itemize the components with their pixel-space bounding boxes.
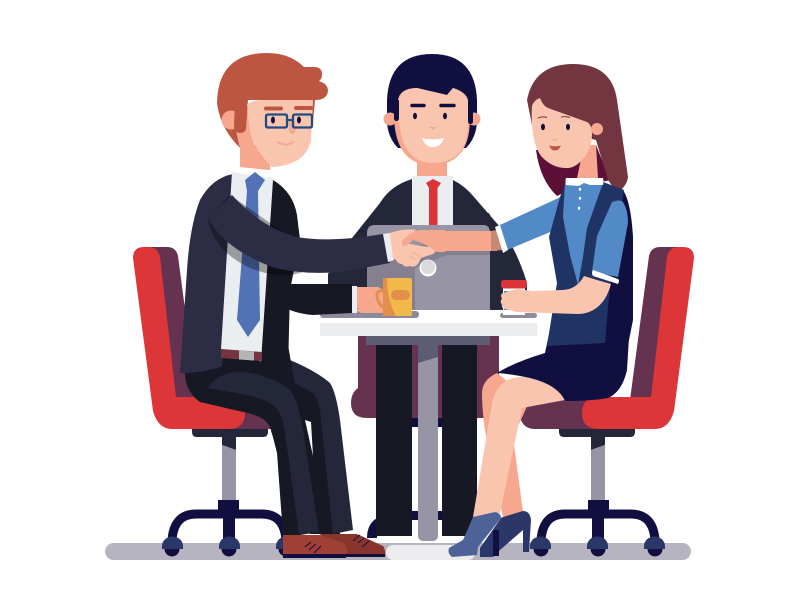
eyes	[541, 124, 545, 130]
brows	[538, 117, 570, 118]
far leg light	[285, 358, 353, 534]
woman	[420, 64, 633, 557]
upper arm sleeve	[592, 200, 628, 277]
mouth	[549, 146, 561, 150]
mug	[377, 278, 412, 316]
hair	[217, 53, 328, 148]
neck	[417, 158, 447, 176]
arm shadow	[208, 195, 330, 275]
back hair	[536, 145, 610, 196]
ear	[591, 123, 603, 135]
handle	[377, 291, 384, 308]
upper arm	[208, 195, 390, 273]
buttons	[579, 189, 580, 208]
jacket right	[261, 180, 300, 370]
fingers	[409, 252, 421, 260]
floor shadow	[105, 543, 691, 560]
jacket left	[180, 174, 240, 373]
tie	[426, 179, 441, 228]
face	[532, 98, 592, 168]
back leg	[482, 373, 530, 517]
forearm holding cup	[501, 276, 611, 314]
eyes	[413, 113, 417, 119]
sideburn	[234, 100, 248, 133]
right office chair	[520, 247, 694, 556]
near leg highlight	[208, 372, 319, 534]
nose	[289, 121, 296, 134]
sleeve	[500, 195, 565, 250]
left office chair	[133, 247, 307, 556]
left man	[180, 53, 394, 558]
ear	[222, 110, 240, 130]
logo	[420, 260, 436, 276]
middle man	[328, 54, 527, 536]
blouse	[563, 183, 603, 285]
neck	[240, 140, 270, 170]
laces	[305, 535, 369, 553]
body	[383, 278, 412, 316]
nose	[429, 127, 437, 130]
woman's hand	[402, 230, 445, 252]
legs	[376, 344, 477, 536]
glasses	[266, 114, 312, 128]
hair	[527, 64, 628, 193]
neck	[577, 145, 598, 178]
lower hand	[352, 286, 357, 313]
laptop	[367, 225, 490, 310]
face shade	[236, 105, 270, 170]
skirt	[497, 320, 630, 401]
far leg dark	[280, 360, 340, 534]
hair strands	[394, 100, 473, 124]
shirt	[221, 172, 273, 362]
handshake	[390, 229, 445, 267]
tray left	[320, 311, 419, 318]
ears	[384, 112, 396, 126]
suit	[328, 179, 527, 310]
far shoe	[320, 534, 385, 557]
collar	[566, 178, 604, 186]
man's hand	[390, 229, 435, 267]
belt	[221, 349, 262, 361]
smile	[422, 138, 444, 147]
label	[391, 290, 410, 300]
lower arm	[272, 284, 352, 315]
tray right	[500, 313, 537, 318]
face	[247, 100, 313, 167]
coffee cup	[501, 280, 527, 315]
back shoe	[480, 511, 531, 557]
table	[320, 310, 537, 541]
brows	[412, 104, 454, 107]
tie	[237, 172, 265, 337]
shirt	[412, 176, 453, 228]
sleeve cuff	[592, 270, 619, 284]
face	[398, 88, 468, 163]
face shade	[394, 88, 470, 165]
middle chair	[351, 213, 499, 538]
under table panel	[366, 335, 490, 345]
cuff	[383, 233, 394, 262]
heel	[493, 530, 499, 556]
table leg	[418, 345, 438, 541]
near shoe	[283, 535, 347, 554]
handshake arm	[420, 231, 497, 251]
near leg dark	[185, 345, 319, 535]
mouth	[278, 142, 293, 144]
table top	[320, 310, 537, 323]
brows	[266, 106, 311, 110]
cuff	[495, 225, 508, 253]
hair	[387, 54, 477, 148]
front leg	[473, 377, 565, 517]
gap between legs	[305, 420, 313, 456]
front shoe	[448, 512, 501, 557]
nose	[551, 139, 558, 141]
back panel of vest	[603, 182, 633, 345]
eyes	[271, 116, 275, 124]
vest	[547, 182, 624, 346]
